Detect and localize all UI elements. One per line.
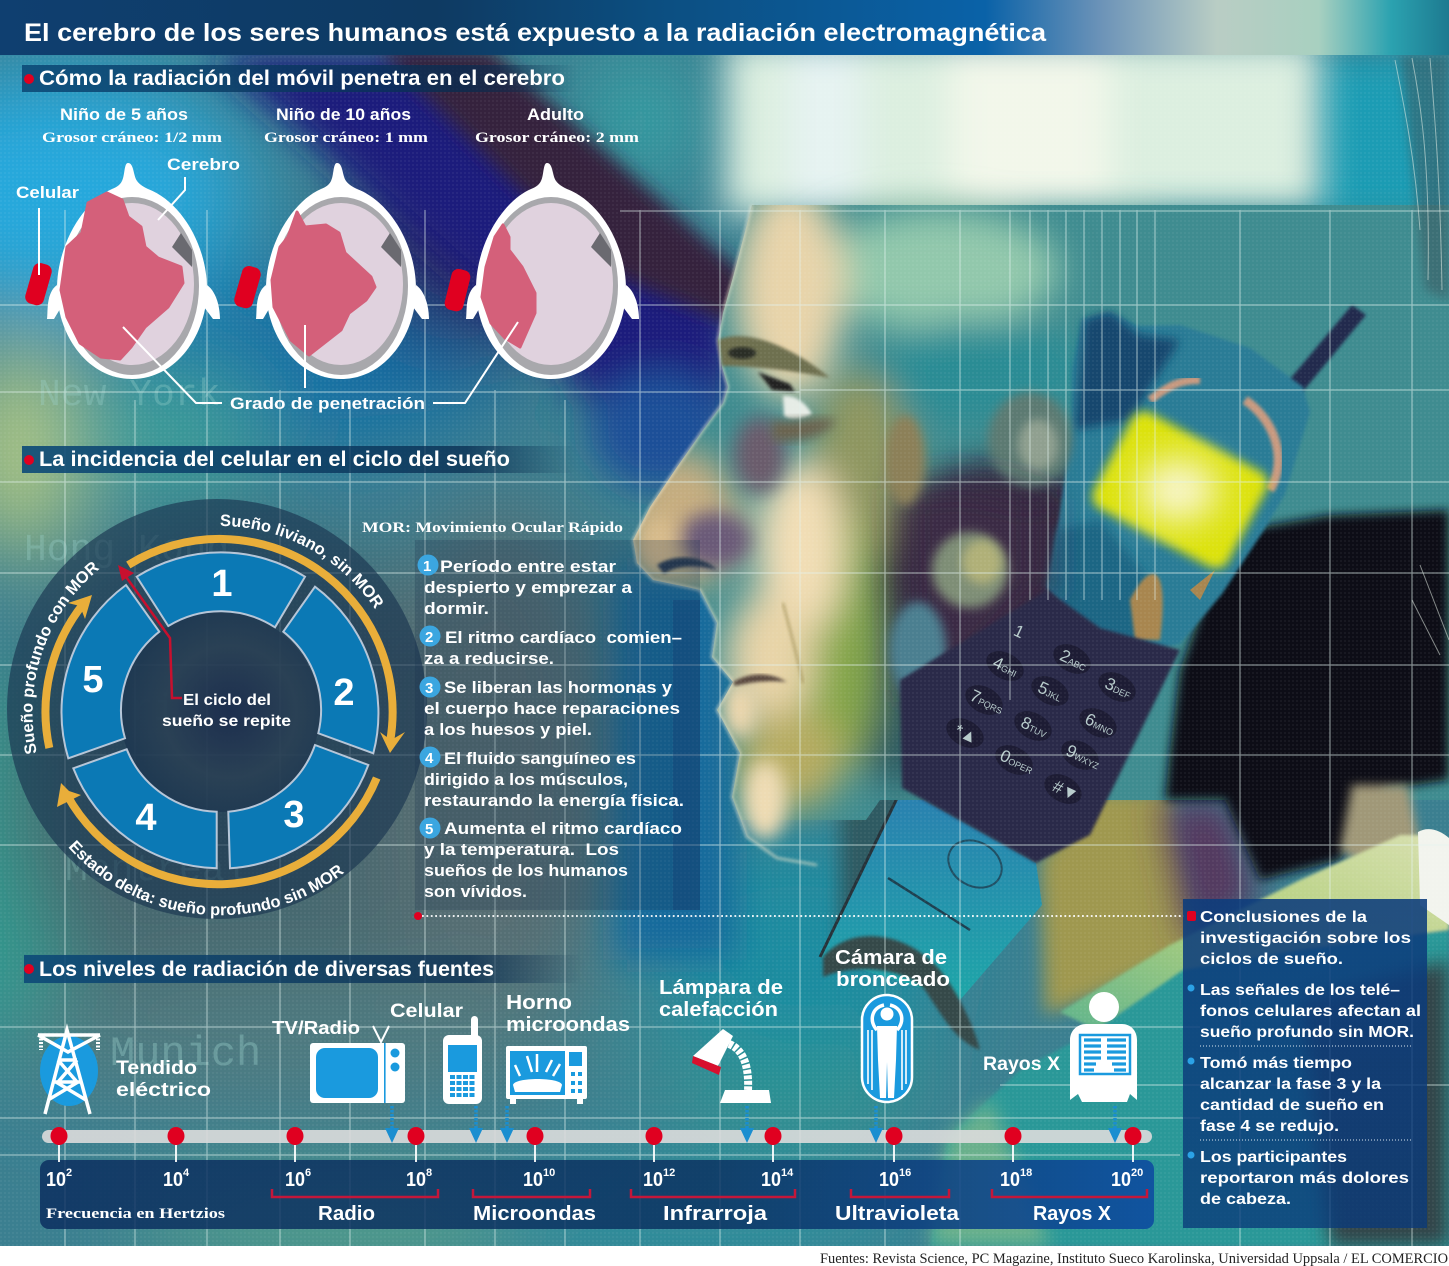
conclusion 1: sueño profundo sin MOR. — [1200, 1024, 1414, 1041]
frequency labels: 18 — [1020, 1167, 1032, 1179]
phase 5: y la temperatura. Los — [424, 840, 619, 859]
icon: microwave — [506, 1046, 587, 1104]
column heading: 10 años — [264, 105, 429, 146]
faint city names: Montreal — [65, 849, 247, 892]
label: tendido eléctrico: Tendido — [116, 1058, 197, 1079]
center label — [162, 692, 291, 730]
icon: tanning bed — [862, 995, 912, 1102]
label: celular: Celular — [390, 1001, 464, 1022]
phase 5: sueños de los humanos — [424, 861, 628, 880]
label: TV/Radio: TV/Radio — [272, 1017, 360, 1038]
frequency labels: 10 — [1000, 1169, 1020, 1191]
chart: frequency scale — [40, 1106, 1154, 1229]
skull: child 10 years — [233, 163, 429, 379]
phase 4: restaurando la energía física. — [424, 791, 684, 810]
faint city names: Hong Kong — [24, 529, 229, 572]
man: nape — [1340, 785, 1420, 870]
yellow arrow: light sleep — [128, 539, 405, 753]
segment 3 — [228, 745, 368, 868]
dark curve under phone flap — [823, 936, 980, 1050]
man: eye and eyebrow — [657, 336, 836, 686]
phone keypad: 8TUV — [1018, 713, 1051, 742]
conclusion 1: fonos celulares afectan al — [1200, 1003, 1421, 1020]
frequency labels: 10 — [879, 1169, 899, 1191]
pale upper panel — [725, 40, 1320, 215]
phase 1 — [418, 554, 633, 618]
frequency labels: 10 — [163, 1169, 183, 1191]
phase 1: dormir. — [424, 599, 489, 618]
segment 3: 3 — [283, 794, 305, 836]
frequency labels: 10 — [643, 1169, 663, 1191]
man: shirt — [1060, 835, 1449, 1030]
conclusion 3: reportaron más dolores — [1200, 1170, 1409, 1187]
frequency labels: 10 — [543, 1167, 555, 1179]
conclusion 3: de cabeza. — [1200, 1191, 1291, 1208]
frequency labels: 10 — [1111, 1169, 1131, 1191]
phase 4 — [420, 746, 684, 810]
phase 2: za a reducirse. — [424, 649, 554, 668]
label: cerebro — [158, 155, 240, 220]
frequency labels: 10 — [523, 1169, 543, 1191]
section heading: ciclo del sueño: La incidencia del celular en el ciclo del sueño — [39, 448, 510, 471]
column heading: adulto: Grosor cráneo: 2 mm — [475, 130, 640, 146]
section heading: ciclo del sueño — [22, 446, 577, 473]
source arrows — [385, 1106, 1122, 1143]
phase 3: a los huesos y piel. — [424, 720, 592, 739]
conclusion 3 — [1188, 1149, 1409, 1208]
conclusion 1: Las señales de los telé– — [1200, 982, 1400, 999]
label: grado de penetración — [123, 322, 518, 413]
segment 4: 4 — [135, 797, 157, 839]
frequency labels — [46, 1167, 1143, 1191]
yellow arrow: delta sleep — [57, 778, 377, 884]
frequency labels: 16 — [899, 1167, 911, 1179]
icon: television — [310, 1026, 405, 1103]
phase 3: Se liberan las hormonas y — [444, 678, 673, 697]
phone keypad: 9WXYZ — [1063, 741, 1104, 773]
label: rayos X: Rayos X — [983, 1054, 1060, 1075]
curved label: delta sleep: Estado delta: sueño profundo sin MOR — [68, 840, 344, 918]
curved label: deep sleep: Sueño profundo con MOR — [20, 562, 100, 754]
yellow radiation glow — [1088, 407, 1272, 573]
label: celular — [16, 183, 79, 275]
column heading: 5 años — [42, 105, 223, 146]
man: jacket — [930, 930, 1449, 1246]
section heading: niveles de radiación: Los niveles de radiación de diversas fuentes — [39, 958, 494, 981]
segment 2 — [283, 587, 378, 753]
phone keypad: 3DEF — [1102, 674, 1135, 703]
faint city names: Paris — [85, 689, 199, 732]
column heading: adulto — [475, 105, 640, 146]
note: MOR definition: MOR: Movimiento Ocular Rápido — [362, 520, 623, 536]
band labels: Ultravioleta — [835, 1203, 960, 1225]
frequency labels: 12 — [663, 1167, 675, 1179]
dotted connector to conclusions — [414, 912, 1184, 920]
phase 2: El ritmo cardíaco comien– — [445, 628, 682, 647]
phone keypad: 4GHI — [990, 653, 1021, 681]
phase 3: el cuerpo hace reparaciones — [424, 699, 680, 718]
label: horno microondas: Horno — [506, 992, 572, 1014]
frequency labels: 20 — [1131, 1167, 1143, 1179]
label: tendido eléctrico: eléctrico — [116, 1080, 211, 1101]
phase 5 — [420, 818, 682, 901]
conclusion 2: cantidad de sueño en — [1200, 1097, 1384, 1114]
conclusion 2 — [1188, 1055, 1384, 1135]
frequency labels: 6 — [305, 1167, 311, 1179]
label: cerebro: Cerebro — [167, 155, 240, 174]
conclusions heading: Conclusiones de la — [1200, 909, 1367, 926]
label: horno microondas — [506, 992, 630, 1036]
phase 5: Aumenta el ritmo cardíaco — [444, 819, 682, 838]
conclusion 2: alcanzar la fase 3 y la — [1200, 1076, 1381, 1093]
faint city names — [24, 374, 261, 1078]
segment 5 — [61, 585, 159, 758]
faint city names: New York — [38, 374, 220, 417]
frequency labels: 14 — [781, 1167, 794, 1179]
panel: conclusions — [1183, 899, 1427, 1228]
man: face — [620, 180, 1449, 840]
column heading: adulto: Adulto — [527, 105, 584, 124]
section heading: penetración: Cómo la radiación del móvil penetra en el cerebro — [39, 67, 565, 90]
phone keypad: 6MNO — [1082, 709, 1118, 739]
icon: x-ray machine — [1070, 992, 1137, 1102]
frequency labels: 2 — [66, 1167, 72, 1179]
label: horno microondas: microondas — [506, 1014, 630, 1036]
hand and fingers — [885, 415, 1045, 698]
phone keypad: 5JKL — [1035, 678, 1066, 706]
label: cámara de bronceado: Cámara de — [835, 947, 947, 969]
center label: sueño se repite — [162, 713, 291, 730]
phase 1: despierto y emprezar a — [424, 578, 633, 597]
icon: cell phone — [443, 1016, 482, 1104]
column heading: 10 años: Grosor cráneo: 1 mm — [264, 130, 429, 146]
phase 5: son vívidos. — [424, 882, 527, 901]
conclusions heading: ciclos de sueño. — [1200, 951, 1343, 968]
band labels: Infrarroja — [663, 1203, 768, 1225]
column heading: 5 años: Niño de 5 años — [60, 105, 188, 124]
band labels — [318, 1203, 1112, 1225]
man: hair top right — [1395, 55, 1449, 655]
axis caption: Frecuencia en Hertzios — [46, 1206, 225, 1222]
segment 5: 5 — [82, 659, 104, 701]
phase 4: El fluido sanguíneo es — [444, 749, 636, 768]
band labels: Rayos X — [1033, 1203, 1112, 1225]
icon: power tower — [38, 1030, 100, 1114]
phase 2 — [420, 626, 682, 668]
phone keypad — [900, 590, 1180, 863]
man: hair — [1165, 510, 1449, 880]
frequency markers — [50, 1127, 1142, 1145]
panel: skull penetration diagrams — [16, 105, 640, 413]
phase 3: 3 — [425, 680, 433, 697]
label: cámara de bronceado: bronceado — [836, 969, 950, 991]
phone keypad: #▼ — [1050, 777, 1082, 805]
yellow arrow: deep sleep — [45, 595, 92, 748]
phone keypad: 1 — [1011, 621, 1027, 642]
phase 3 — [420, 676, 680, 739]
label: lámpara de calefacción: calefacción — [659, 999, 778, 1021]
conclusion 3: Los participantes — [1200, 1149, 1347, 1166]
phase 4: 4 — [425, 750, 434, 767]
center label: El ciclo del — [183, 692, 271, 709]
segment 4 — [73, 749, 217, 868]
conclusions heading — [1200, 909, 1411, 968]
frequency labels: 10 — [406, 1169, 426, 1191]
column heading: 5 años: Grosor cráneo: 1/2 mm — [42, 130, 223, 146]
panel: numbered sleep phases — [415, 540, 700, 910]
label: celular: Celular — [16, 183, 79, 202]
segment 2: 2 — [333, 672, 355, 714]
phone keypad: *▲ — [952, 721, 981, 748]
column heading: 10 años: Niño de 10 años — [276, 105, 411, 124]
conclusion 2: fase 4 se redujo. — [1200, 1118, 1339, 1135]
phone keypad: 2ABC — [1057, 646, 1091, 675]
phase 1: Período entre estar — [440, 557, 616, 576]
man: neck shadow — [1160, 800, 1260, 945]
skull: child 5 years — [24, 163, 220, 379]
phone keypad: 0OPER — [997, 746, 1037, 778]
title bar — [0, 0, 1449, 55]
dark diagonal light band — [380, 50, 745, 325]
man: white collar — [1418, 829, 1449, 925]
phone flap — [820, 788, 1042, 1000]
band labels: Microondas — [473, 1203, 596, 1225]
phone keypad: 7PQRS — [967, 686, 1007, 718]
label: lámpara de calefacción — [659, 977, 783, 1021]
phase 1: 1 — [423, 558, 431, 575]
frequency labels: 4 — [183, 1167, 190, 1179]
band labels: Radio — [318, 1203, 375, 1225]
frequency labels: 10 — [285, 1169, 305, 1191]
conclusion 2: Tomó más tiempo — [1200, 1055, 1352, 1072]
red arrow: cycle repeats — [118, 565, 182, 698]
faint city names: Munich — [110, 1030, 261, 1078]
curved label: light sleep: Sueño liviano, sin MOR — [220, 514, 383, 610]
label: tendido eléctrico — [116, 1058, 211, 1101]
man: back of head and ear area — [800, 205, 1449, 510]
phase 2: 2 — [425, 629, 433, 646]
segment 1: 1 — [211, 563, 233, 605]
frequency labels: 8 — [426, 1167, 432, 1179]
conclusion 1 — [1188, 982, 1421, 1041]
chart: sleep cycle ring — [7, 499, 427, 919]
frequency labels: 10 — [46, 1169, 66, 1191]
label: cámara de bronceado — [835, 947, 950, 991]
section heading: niveles de radiación — [24, 955, 582, 983]
label: grado de penetración: Grado de penetración — [230, 394, 425, 413]
man: dark jaw shadow — [840, 760, 905, 950]
phase 4: dirigido a los músculos, — [424, 770, 628, 789]
phase 5: 5 — [425, 821, 433, 838]
label: lámpara de calefacción: Lámpara de — [659, 977, 783, 999]
title: El cerebro de los seres humanos está expuesto a la radiación electromagnética — [24, 19, 1047, 47]
conclusions heading: investigación sobre los — [1200, 930, 1411, 947]
footer: sources — [0, 1246, 1449, 1266]
phone — [885, 305, 1366, 863]
skull: adult — [443, 163, 639, 379]
segment 1 — [137, 552, 305, 627]
man: neck — [1040, 790, 1205, 1015]
frequency labels: 10 — [761, 1169, 781, 1191]
icon: heat lamp — [692, 1029, 771, 1103]
band brackets — [272, 1189, 1147, 1197]
